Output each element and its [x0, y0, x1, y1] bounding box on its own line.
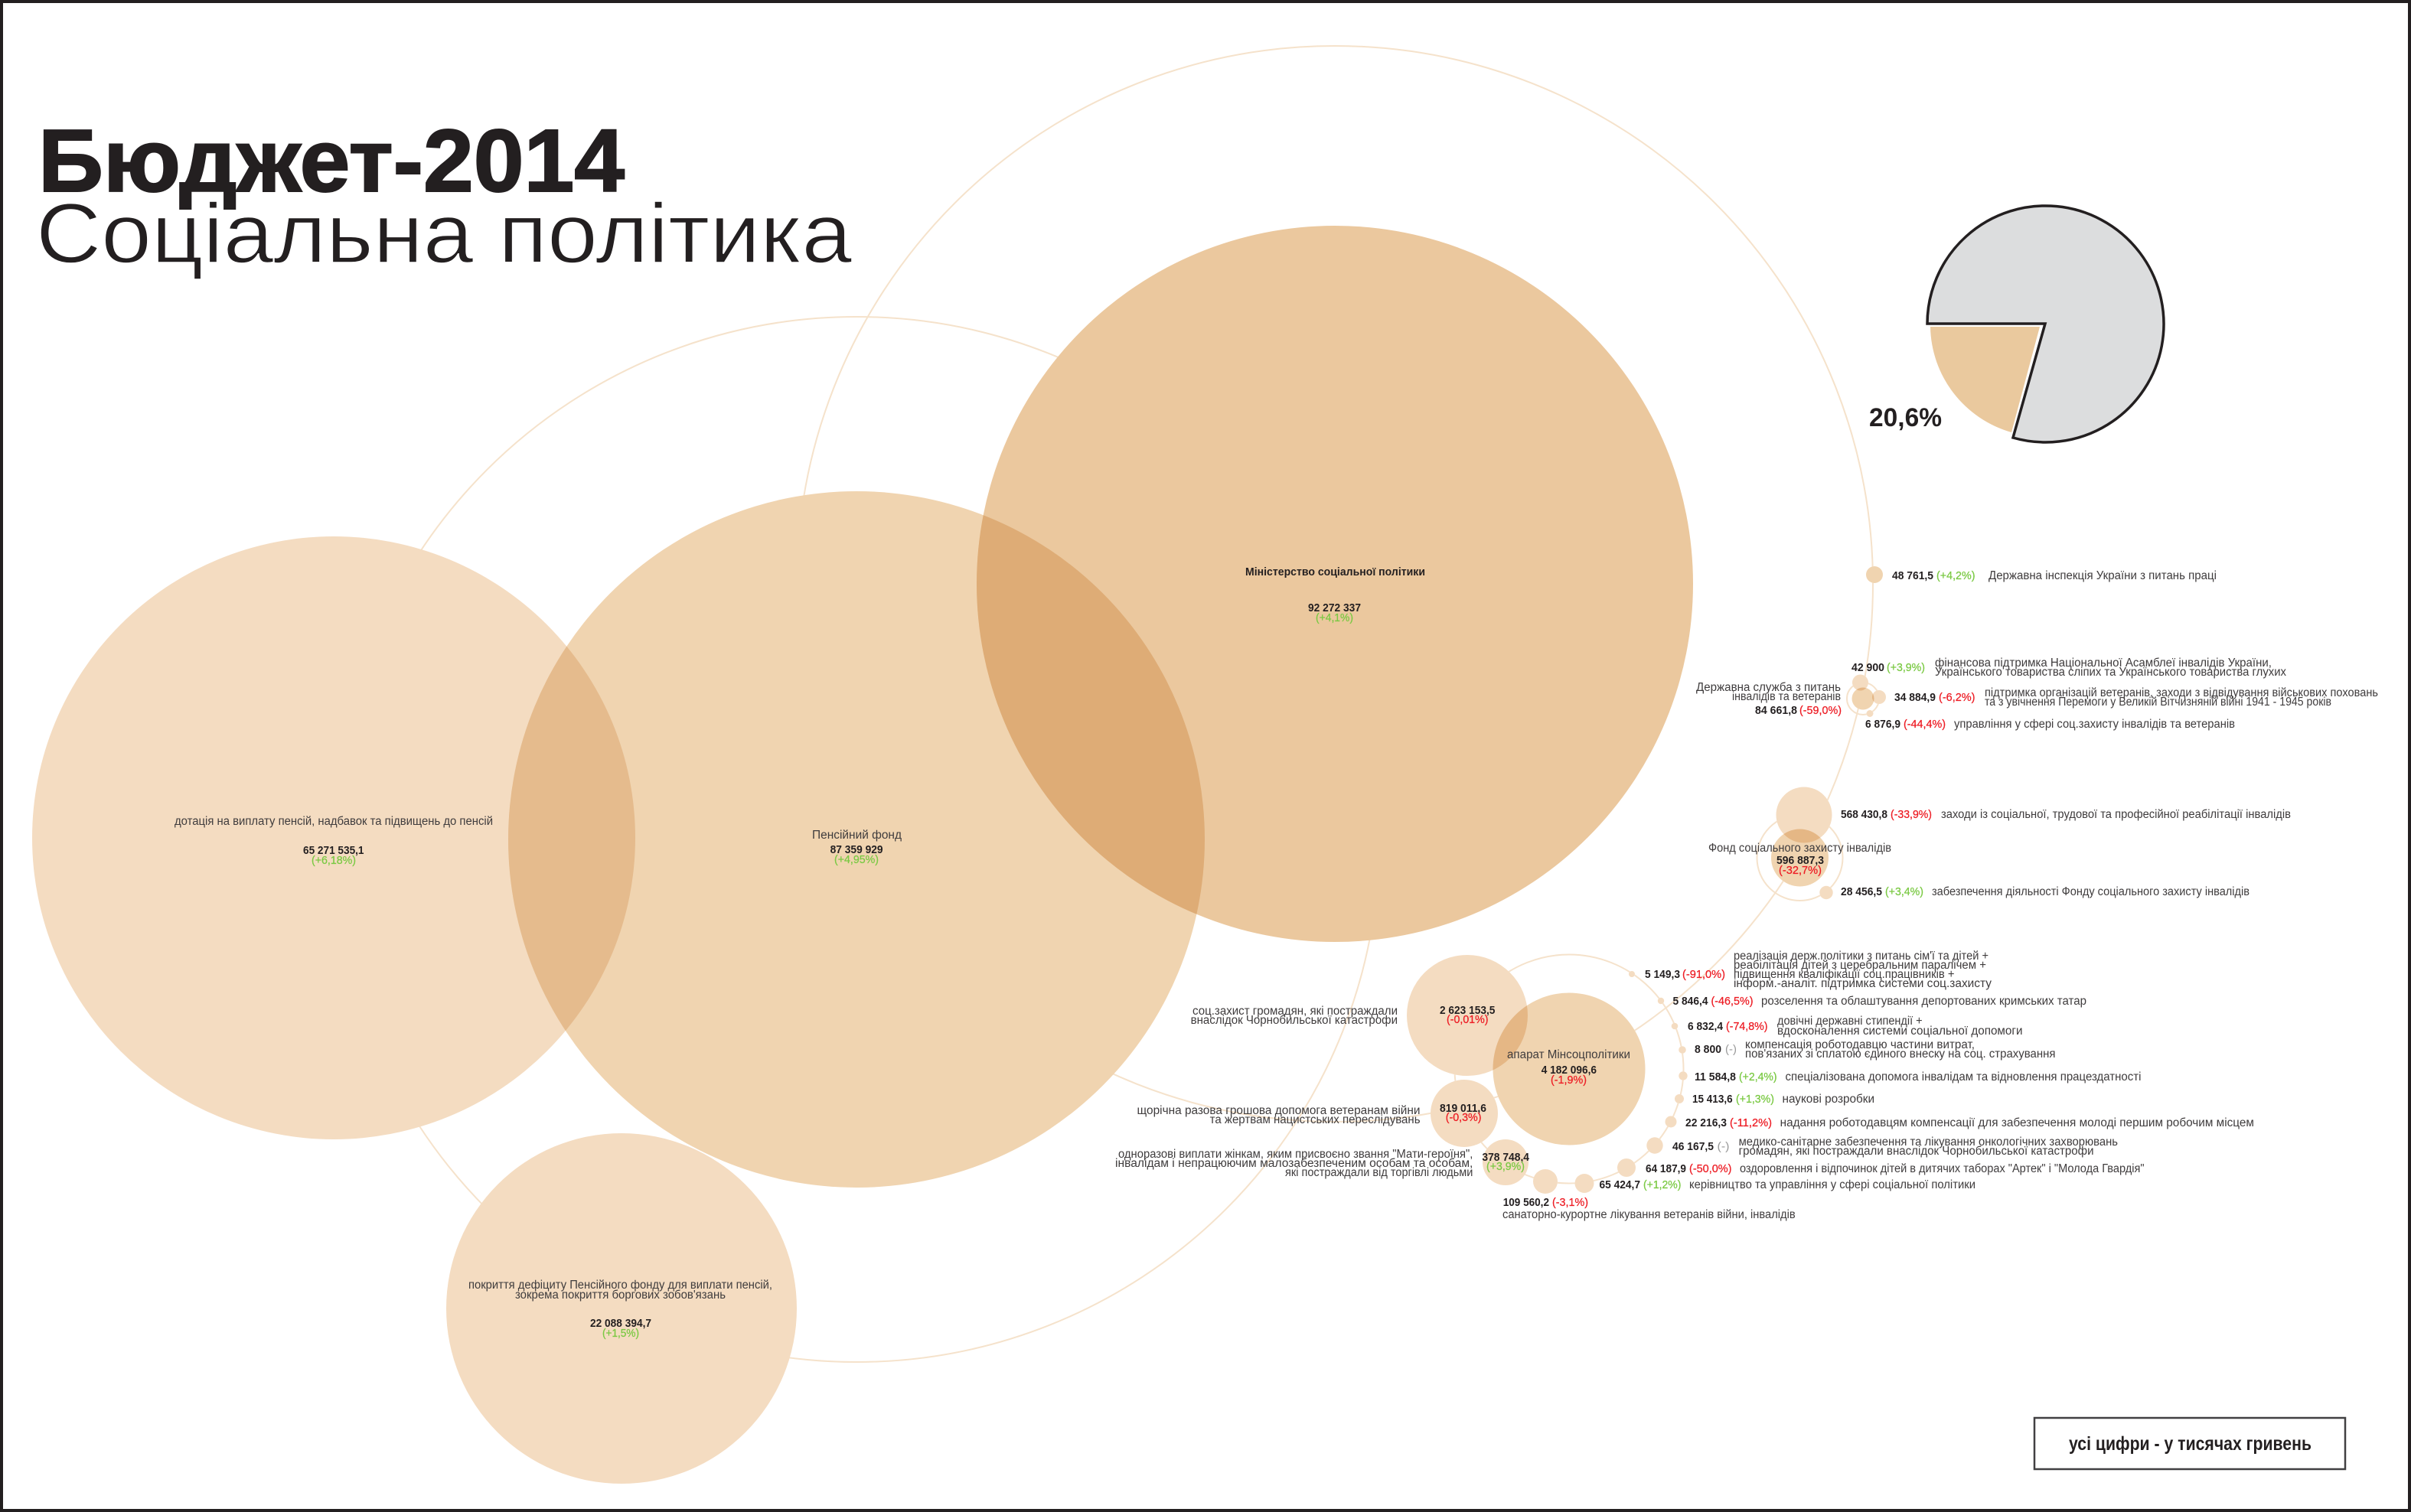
label: одноразові виплати: (+3,9%) [1486, 1160, 1525, 1173]
label: Пенсійний фонд: 87 359 929 [830, 843, 883, 856]
label: забезпечення діяльності Фонду: забезпечення діяльності Фонду соціального захисту інвалідів [1932, 885, 2250, 898]
label: Державна служба: (-59,0%) [1799, 704, 1842, 717]
label: фінансова підтримка: (+3,9%) [1887, 661, 1925, 674]
label: Міністерство соціальної політики: 92 272 337 [1308, 601, 1361, 614]
label: Державна інспекція: 48 761,5 [1892, 569, 1933, 582]
connector rings [334, 46, 1879, 1362]
label: Державна інспекція [1892, 569, 2217, 582]
title: Бюджет-2014 [38, 111, 625, 210]
label: Пенсійний фонд [812, 829, 902, 866]
label: соц.захист Чорнобиль: внаслідок Чорнобильської катастрофи [1191, 1014, 1398, 1027]
label: одноразові виплати [1115, 1148, 1530, 1179]
label: Фонд соціального захисту інвалідів: (-32,7%) [1779, 864, 1822, 877]
label: Державна служба: 84 661,8 [1755, 704, 1797, 717]
label: санаторно-курортне лікування: санаторно-курортне лікування ветеранів війни, інвалідів [1502, 1208, 1796, 1221]
label: наукові розробки: 15 413,6 [1692, 1093, 1733, 1106]
label: щорічна разова допомога: (-0,3%) [1446, 1111, 1482, 1124]
label: одноразові виплати: інвалідам і непрацюючим малозабезпеченим особам та особам, [1115, 1157, 1473, 1170]
label: щорічна разова допомога: та жертвам нацистських переслідувань [1210, 1113, 1421, 1126]
label: одноразові виплати: 378 748,4 [1482, 1151, 1530, 1164]
label: оздоровлення і відпочинок дітей: (-50,0%) [1689, 1162, 1731, 1175]
label: заходи із реабілітації: заходи із соціальної, трудової та професійної реабілітації інвалідів [1941, 808, 2291, 821]
label: Пенсійний фонд: Пенсійний фонд [812, 829, 902, 842]
label: дотація на виплату пенсій: дотація на виплату пенсій, надбавок та підвищень до пенсій [175, 815, 493, 828]
label: реалізація держ.політики: реабілітація дітей з церебральним паралічем + [1734, 959, 1986, 972]
label: оздоровлення і відпочинок дітей: 64 187,9 [1646, 1162, 1686, 1175]
label: реалізація держ.політики: реалізація держ.політики з питань сім'ї та дітей + [1734, 950, 1989, 963]
label: Міністерство соціальної політики [1245, 565, 1425, 624]
label: фінансова підтримка [1851, 657, 2286, 679]
label: санаторно-курортне лікування: 109 560,2 [1503, 1196, 1549, 1209]
label: підтримка організацій ветеранів: 34 884,9 [1894, 691, 1936, 704]
label: дотація на виплату пенсій [175, 815, 493, 867]
label: дотація на виплату пенсій: 65 271 535,1 [303, 844, 364, 857]
label: керівництво та управління: 65 424,7 [1600, 1178, 1640, 1191]
label: фінансова підтримка: 42 900 [1851, 661, 1884, 674]
label: апарат Мінсоцполітики [1507, 1048, 1630, 1087]
label: одноразові виплати: які постраждали від торгівлі людьми [1285, 1166, 1473, 1179]
label: Державна інспекція: (+4,2%) [1936, 569, 1975, 582]
pie chart: share of budget [1869, 206, 2164, 442]
label: керівництво та управління: керівництво та управління у сфері соціальної політики [1689, 1178, 1975, 1191]
label: Державна служба: інвалідів та ветеранів [1732, 690, 1841, 703]
label: реалізація держ.політики [1645, 950, 1992, 990]
label: управління у сфері соц.захисту: 6 876,9 [1865, 718, 1900, 731]
label: покриття дефіциту Пенсійного фонду: покриття дефіциту Пенсійного фонду для виплати пенсій, [468, 1279, 772, 1292]
label: Державна служба [1696, 681, 1842, 717]
label: надання роботодавцям компенсації: 22 216,3 [1685, 1116, 1727, 1129]
label: довічні державні стипендії: 6 832,4 [1688, 1020, 1724, 1033]
label: надання роботодавцям компенсації: (-11,2%) [1730, 1116, 1772, 1129]
title [36, 111, 853, 281]
pie chart: share of budget: 20,6% [1869, 403, 1942, 432]
label: наукові розробки [1692, 1093, 1874, 1106]
note box: units [2034, 1418, 2345, 1469]
label: підтримка організацій ветеранів: та з увічнення Перемоги у Великій Вітчизняній війні 1941 - 1945 років [1985, 696, 2331, 709]
label: розселення кримських татар: 5 846,4 [1673, 995, 1708, 1008]
label: наукові розробки: (+1,3%) [1736, 1093, 1774, 1106]
label: управління у сфері соц.захисту: (-44,4%) [1904, 718, 1946, 731]
label: одноразові виплати: одноразові виплати жінкам, яким присвоєно звання "Мати-героїня", [1118, 1148, 1473, 1161]
label: санаторно-курортне лікування: (-3,1%) [1552, 1196, 1588, 1209]
label: Міністерство соціальної політики: (+4,1%) [1316, 611, 1353, 624]
label: соц.захист Чорнобиль: соц.захист громадян, які постраждали [1192, 1005, 1398, 1018]
label: санаторно-курортне лікування [1502, 1196, 1796, 1221]
label: підтримка організацій ветеранів: (-6,2%) [1939, 691, 1975, 704]
label: фінансова підтримка: Українського товариства сліпих та Українського товариства глухих [1935, 666, 2286, 679]
label: спеціалізована допомога: спеціалізована допомога інвалідам та відновлення працездатності [1785, 1070, 2142, 1083]
label: підтримка організацій ветеранів [1894, 686, 2378, 709]
label: реалізація держ.політики: інформ.-аналіт. підтримка системи соц.захисту [1734, 977, 1992, 990]
label: спеціалізована допомога: 11 584,8 [1695, 1070, 1736, 1083]
label: реалізація держ.політики: (-91,0%) [1682, 968, 1725, 981]
label: надання роботодавцям компенсації: надання роботодавцям компенсації для забезпечення молоді першим робочим місцем [1780, 1116, 2254, 1129]
label: апарат Мінсоцполітики: апарат Мінсоцполітики [1507, 1048, 1630, 1061]
label: наукові розробки: наукові розробки [1782, 1093, 1874, 1106]
label: медико-санітарне забезпечення [1672, 1136, 2118, 1158]
label: щорічна разова допомога: щорічна разова грошова допомога ветеранам війни [1137, 1104, 1421, 1117]
label: заходи із реабілітації: (-33,9%) [1891, 808, 1932, 821]
label: оздоровлення і відпочинок дітей: оздоровлення і відпочинок дітей в дитячих таборах "Артек" і "Молода Гвардія" [1740, 1162, 2145, 1175]
label: покриття дефіциту Пенсійного фонду: 22 088 394,7 [590, 1317, 651, 1330]
label: покриття дефіциту Пенсійного фонду: (+1,5%) [602, 1327, 639, 1340]
label: соц.захист Чорнобиль: 2 623 153,5 [1440, 1004, 1495, 1017]
label: розселення кримських татар: (-46,5%) [1711, 995, 1753, 1008]
label: Міністерство соціальної політики: Міністерство соціальної політики [1245, 565, 1425, 578]
label: довічні державні стипендії [1688, 1015, 2022, 1038]
label: керівництво та управління: (+1,2%) [1643, 1178, 1681, 1191]
label: компенсація роботодавцю: (-) [1725, 1043, 1737, 1056]
label: покриття дефіциту Пенсійного фонду: зокрема покриття боргових зобов'язань [515, 1289, 726, 1302]
label: Державна інспекція: Державна інспекція України з питань праці [1989, 569, 2217, 582]
label: компенсація роботодавцю: 8 800 [1695, 1043, 1721, 1056]
label: компенсація роботодавцю [1695, 1038, 2056, 1061]
label: дотація на виплату пенсій: (+6,18%) [312, 854, 356, 867]
label: щорічна разова допомога [1137, 1102, 1486, 1126]
label: Державна служба: Державна служба з питань [1696, 681, 1841, 694]
label: медико-санітарне забезпечення: медико-санітарне забезпечення та лікування онкологічних захворювань [1739, 1136, 2118, 1149]
label: медико-санітарне забезпечення: 46 167,5 [1672, 1140, 1714, 1153]
label: апарат Мінсоцполітики: 4 182 096,6 [1542, 1064, 1597, 1077]
label: розселення кримських татар: розселення та облаштування депортованих кримських татар [1761, 995, 2086, 1008]
label: реалізація держ.політики: підвищення кваліфікації соц.працівників + [1734, 968, 1955, 981]
label: покриття дефіциту Пенсійного фонду [468, 1279, 772, 1340]
note box: units: усі цифри - у тисячах гривень [2069, 1433, 2311, 1455]
label: компенсація роботодавцю: пов'язаних зі сплатою єдиного внеску на соц. страхування [1745, 1048, 2056, 1061]
label: соц.захист Чорнобиль: (-0,01%) [1447, 1013, 1488, 1026]
label: фінансова підтримка: фінансова підтримка Національної Асамблеї інвалідів України, [1935, 657, 2272, 670]
label: компенсація роботодавцю: компенсація роботодавцю частини витрат, [1745, 1038, 1975, 1051]
label: апарат Мінсоцполітики: (-1,9%) [1551, 1074, 1587, 1087]
label: заходи із реабілітації: 568 430,8 [1841, 808, 1887, 821]
label: медико-санітарне забезпечення: (-) [1718, 1140, 1730, 1153]
label: Фонд соціального захисту інвалідів [1708, 842, 1891, 877]
label: управління у сфері соц.захисту: управління у сфері соц.захисту інвалідів та ветеранів [1954, 718, 2235, 731]
label: Фонд соціального захисту інвалідів: 596 887,3 [1776, 854, 1824, 867]
label: довічні державні стипендії: довічні державні стипендії + [1777, 1015, 1923, 1028]
label: забезпечення діяльності Фонду: (+3,4%) [1885, 885, 1923, 898]
label: Пенсійний фонд: (+4,95%) [834, 853, 879, 866]
title: Соціальна політика [36, 187, 853, 281]
label: медико-санітарне забезпечення: громадян, які постраждали внаслідок Чорнобильської катастрофи [1739, 1145, 2094, 1158]
label: довічні державні стипендії: (-74,8%) [1726, 1020, 1768, 1033]
label: забезпечення діяльності Фонду: 28 456,5 [1841, 885, 1882, 898]
label: реалізація держ.політики: 5 149,3 [1645, 968, 1680, 981]
label: довічні державні стипендії: вдосконалення системи соціальної допомоги [1777, 1025, 2022, 1038]
label: Фонд соціального захисту інвалідів: Фонд соціального захисту інвалідів [1708, 842, 1891, 855]
label: підтримка організацій ветеранів: підтримка організацій ветеранів, заходи з відвідування військових поховань [1985, 686, 2378, 699]
label: щорічна разова допомога: 819 011,6 [1440, 1102, 1486, 1115]
bubble chart: budget circles [32, 226, 1886, 1484]
label: спеціалізована допомога: (+2,4%) [1739, 1070, 1777, 1083]
label: соц.захист Чорнобиль [1191, 1004, 1495, 1027]
